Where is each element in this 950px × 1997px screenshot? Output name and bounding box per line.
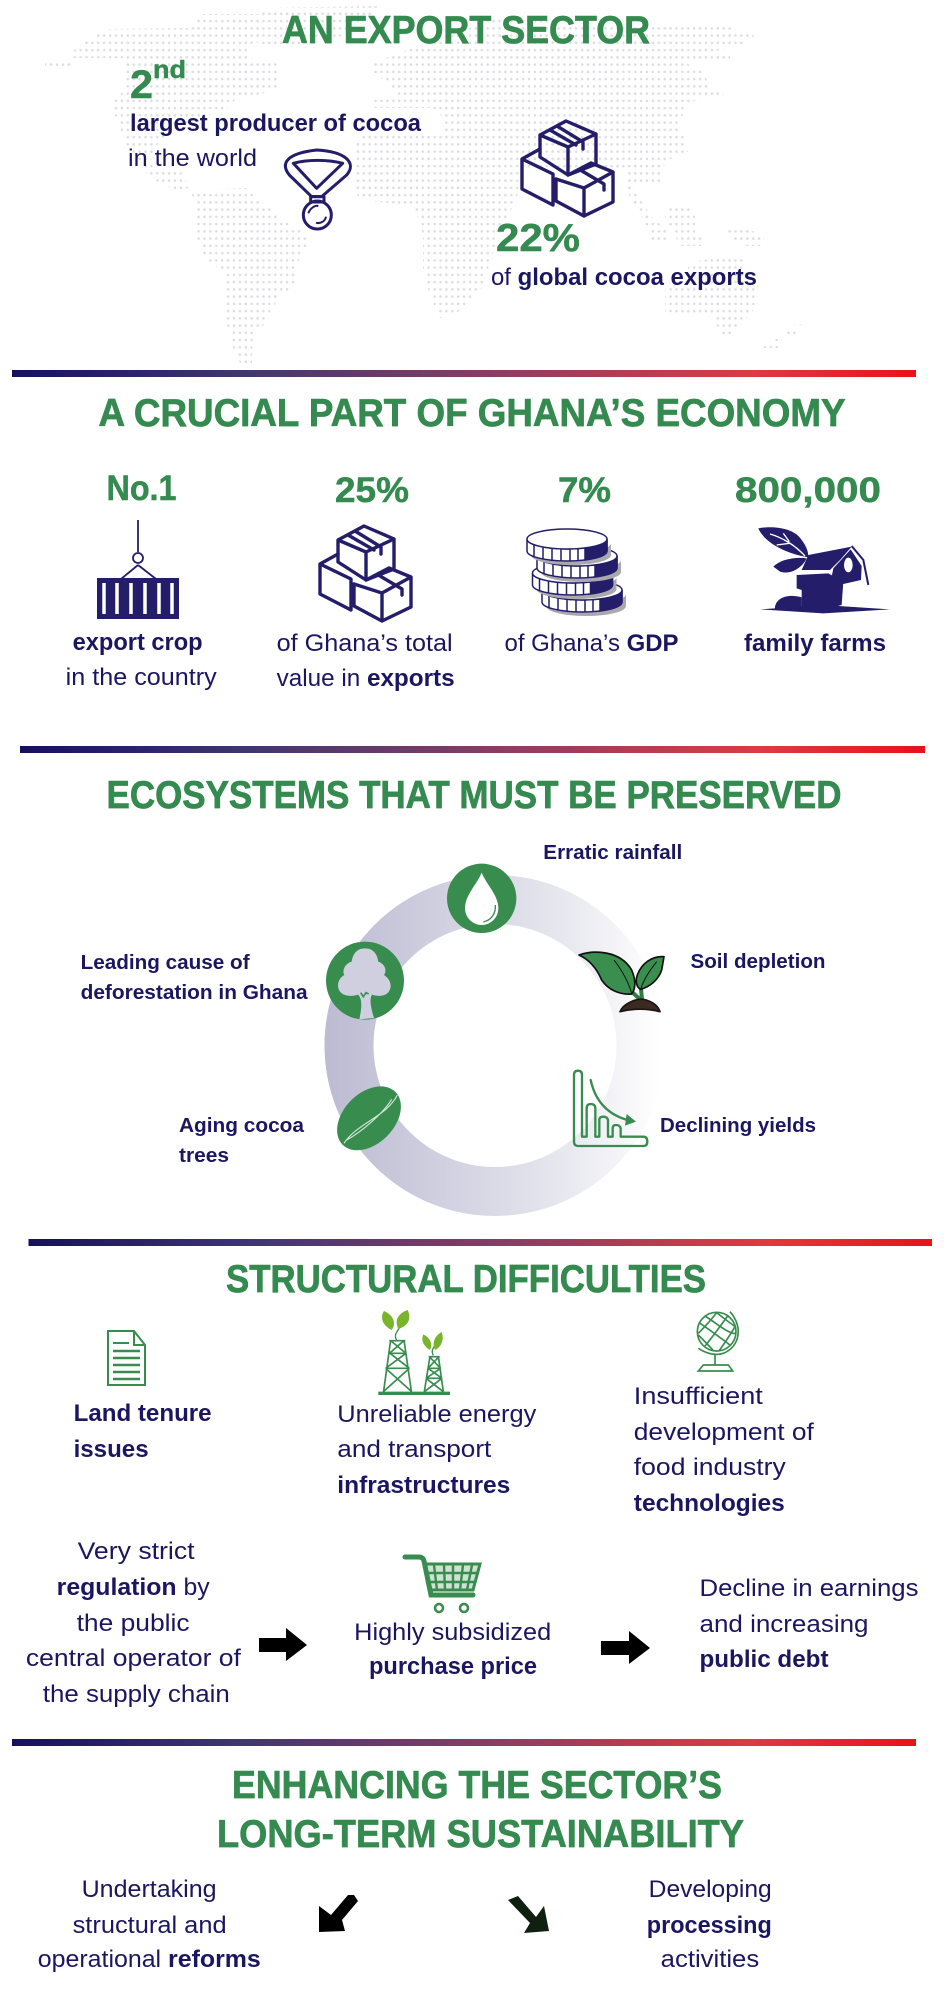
icon: globe — [697, 1312, 738, 1371]
heading: enhancing the sector's long-term sustainability — [217, 1764, 744, 1856]
arrow: down-right — [508, 1896, 549, 1933]
text: very strict regulation: the supply chain — [43, 1681, 230, 1708]
text: of Ghana's total: of Ghana’s total — [277, 630, 453, 657]
heading: enhancing the sector's long-term sustainability: LONG-TERM SUSTAINABILITY — [217, 1813, 744, 1856]
text: decline in earnings — [700, 1575, 918, 1673]
divider bar 2 — [20, 746, 925, 753]
heading: an export sector: AN EXPORT SECTOR — [282, 9, 650, 52]
arrow: right — [601, 1631, 650, 1664]
text: developing processing activities — [647, 1876, 772, 1973]
text: unreliable energy: and transport — [337, 1436, 492, 1463]
text: unreliable energy: Unreliable energy — [337, 1401, 536, 1428]
text: unreliable energy: infrastructures — [337, 1472, 510, 1499]
dotted world map — [30, 0, 820, 372]
text: in the country: in the country — [66, 664, 217, 691]
text: family farms: family farms — [744, 630, 886, 657]
label: leading cause of deforestation: Leading cause of — [81, 952, 250, 974]
panel: a crucial part of Ghana's economy — [66, 392, 890, 692]
stat: 7%: 7% — [558, 471, 611, 510]
stat: No.1: No.1 — [106, 469, 176, 508]
label: soil depletion: Soil depletion — [690, 951, 826, 973]
text: undertaking reforms: operational reforms — [38, 1946, 261, 1973]
divider bar 1 — [12, 370, 916, 377]
text: of global cocoa exports: of global cocoa exports — [491, 264, 757, 291]
text: highly subsidized purchase price: Highly subsidized — [354, 1619, 551, 1646]
heading: ecosystems: ECOSYSTEMS THAT MUST BE PRESERVED — [106, 774, 842, 817]
icon: water drop — [447, 864, 516, 933]
text: insufficient technologies: food industry — [634, 1454, 786, 1481]
icon: stacked boxes — [320, 526, 411, 621]
arrow: down-left — [319, 1895, 358, 1932]
text: undertaking reforms: structural and — [73, 1912, 227, 1939]
text: largest producer of cocoa: largest producer of cocoa — [130, 110, 422, 137]
icon: declining chart — [574, 1071, 647, 1146]
icon: shipping container on a hook — [97, 520, 179, 619]
text: insufficient technologies: Insufficient — [634, 1383, 763, 1410]
label: aging cocoa trees: Aging cocoa — [179, 1115, 305, 1137]
stat: 800,000: 800,000 — [735, 471, 881, 510]
text: land tenure issues: Land tenure — [74, 1400, 212, 1427]
icon: family farm — [758, 527, 890, 613]
icon: tree — [326, 942, 404, 1020]
icon: shopping cart — [405, 1557, 480, 1612]
text: developing processing activities: activities — [661, 1946, 759, 1973]
text: very strict regulation — [26, 1538, 241, 1708]
icon: coin stack — [527, 529, 626, 616]
icon: medal — [285, 150, 350, 229]
divider bar 4 — [12, 1739, 916, 1746]
panel: structural difficulties — [26, 1258, 918, 1708]
stat: 25%: 25% — [335, 471, 409, 510]
panel: enhancing long-term sustainability — [38, 1764, 772, 1973]
text: in the world: in the world — [128, 145, 257, 172]
text: insufficient technologies: technologies — [634, 1490, 785, 1517]
arrow: right — [259, 1628, 307, 1661]
label: aging cocoa trees — [179, 1115, 305, 1167]
text: very strict regulation: the public — [77, 1610, 190, 1637]
text: decline in earnings: Decline in earnings — [700, 1575, 918, 1602]
text: very strict regulation: regulation by — [57, 1574, 210, 1601]
text: developing processing activities: Developing — [649, 1876, 772, 1903]
text: land tenure issues — [74, 1400, 212, 1463]
text: very strict regulation: central operator of — [26, 1645, 241, 1672]
divider bar 3 — [28, 1239, 932, 1246]
text: very strict regulation: Very strict — [78, 1538, 195, 1565]
icon: cocoa bean — [325, 1074, 413, 1163]
icon: seedling — [579, 952, 664, 1012]
text: highly subsidized purchase price: purchase price — [369, 1653, 537, 1680]
icon: document — [108, 1331, 145, 1385]
icon: green energy towers — [378, 1310, 450, 1393]
label: declining yields: Declining yields — [660, 1115, 816, 1137]
text: decline in earnings: public debt — [700, 1646, 828, 1673]
text: unreliable energy — [337, 1401, 536, 1499]
icon: stacked boxes — [522, 121, 613, 216]
label: leading cause of deforestation — [81, 952, 309, 1004]
panel: ecosystems that must be preserved — [81, 774, 842, 1192]
text: insufficient technologies: development of — [634, 1419, 814, 1446]
label: aging cocoa trees: trees — [179, 1145, 229, 1167]
text: insufficient technologies — [634, 1383, 814, 1517]
text: developing processing activities: processing — [647, 1912, 772, 1939]
text: decline in earnings: and increasing — [700, 1611, 868, 1638]
label: leading cause of deforestation: deforestation in Ghana — [81, 982, 309, 1004]
text: undertaking reforms — [38, 1876, 261, 1973]
text: export crop: export crop — [73, 629, 203, 656]
stat: 2nd: 2 — [130, 63, 153, 107]
superscript: nd: nd — [153, 56, 186, 84]
text: of Ghana's GDP: of Ghana’s GDP — [504, 630, 678, 657]
text: value in exports: value in exports — [277, 665, 455, 692]
text: highly subsidized purchase price — [354, 1619, 551, 1680]
heading: structural difficulties: STRUCTURAL DIFFICULTIES — [226, 1258, 706, 1301]
stat: 22%: 22% — [496, 217, 580, 260]
heading: crucial part: A CRUCIAL PART OF GHANA’S ECONOMY — [98, 392, 846, 435]
heading: enhancing the sector's long-term sustainability: ENHANCING THE SECTOR’S — [232, 1764, 722, 1807]
text: undertaking reforms: Undertaking — [82, 1876, 217, 1903]
ring diagram — [349, 900, 641, 1192]
text: land tenure issues: issues — [74, 1436, 149, 1463]
label: erratic rainfall: Erratic rainfall — [543, 842, 682, 864]
panel: an export sector — [30, 0, 820, 372]
